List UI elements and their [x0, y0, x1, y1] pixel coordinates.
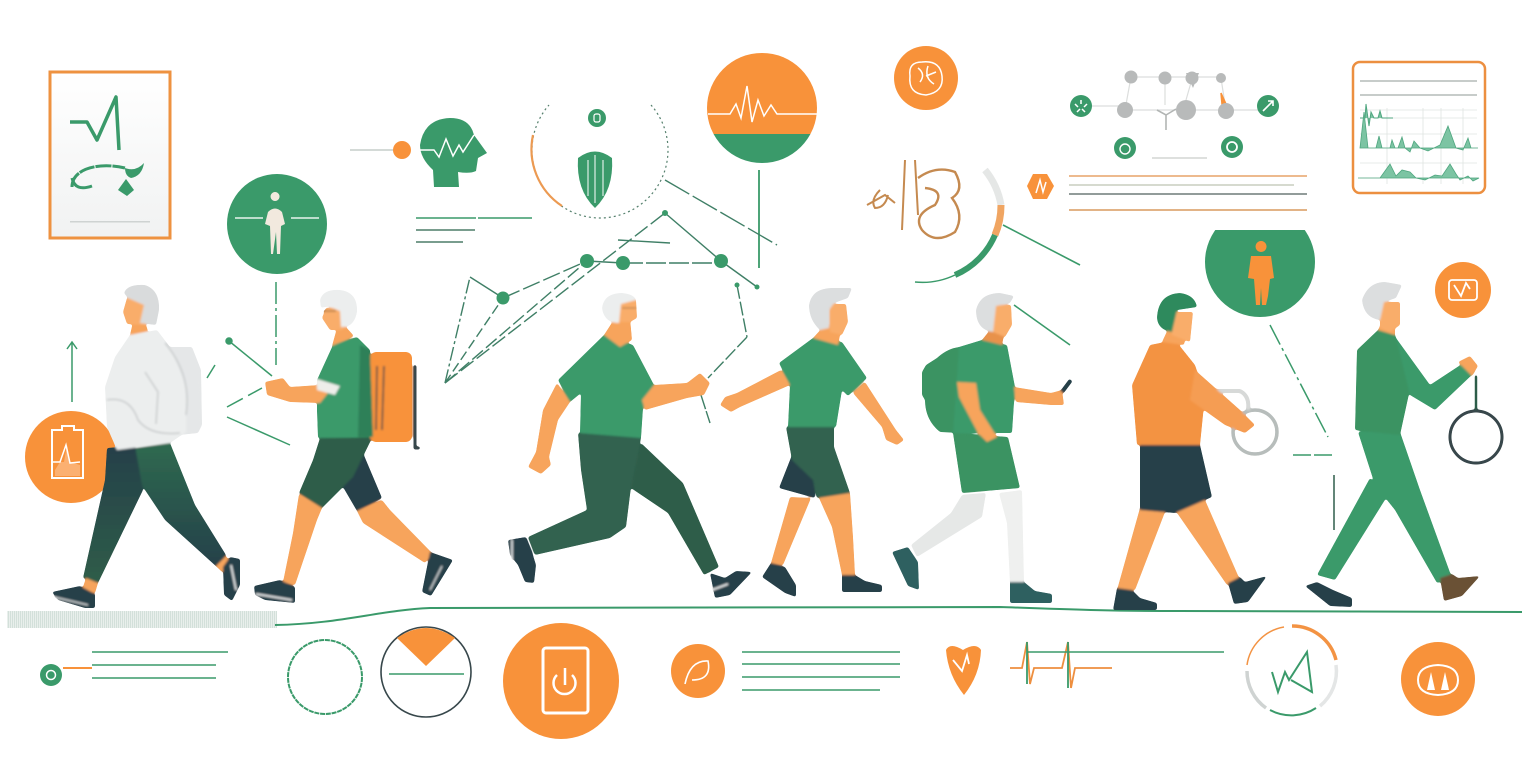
neck and face	[982, 330, 1005, 345]
left leg	[771, 497, 811, 565]
figure: walker 2 orange backpack	[254, 290, 453, 603]
backpack	[370, 352, 412, 442]
icon: small orange hexagon	[1027, 174, 1054, 199]
arm	[265, 378, 328, 403]
shoes	[892, 547, 919, 590]
icon: green node right	[1257, 95, 1279, 117]
panel: chart card top right	[1353, 62, 1485, 193]
shoes	[1305, 582, 1352, 607]
jacket	[105, 330, 186, 450]
chart: middle area series	[1360, 112, 1478, 152]
panel: report card top left	[50, 72, 170, 238]
dark shorts	[343, 453, 382, 511]
bottom row: segmented ring gauge	[1247, 626, 1336, 715]
icon: green node left	[1070, 95, 1092, 117]
hair	[976, 293, 1014, 332]
ring held	[1475, 375, 1477, 411]
icon: green node lower right	[1221, 136, 1243, 158]
neck and face	[1378, 322, 1395, 335]
dark shorts panel	[779, 455, 815, 498]
icon: orange brain circle	[894, 46, 958, 110]
network lines centre	[445, 180, 1080, 423]
connectors right side	[1270, 325, 1335, 530]
bottom row: orange leaf circle	[671, 644, 725, 698]
connectors near walkers one and two	[207, 338, 290, 445]
icon: green circle with silhouette	[227, 174, 327, 274]
front leg	[1358, 432, 1452, 583]
left arm	[957, 382, 997, 442]
bottom row: ECG trace	[1010, 642, 1224, 688]
shirt	[558, 335, 654, 438]
neck and face	[332, 326, 354, 346]
arm	[1396, 338, 1475, 410]
shoes	[254, 580, 295, 603]
skirt	[953, 433, 1020, 493]
shoes	[52, 586, 95, 608]
shoes	[508, 537, 536, 583]
hair	[602, 293, 636, 323]
icon: orange battery circle	[25, 411, 117, 503]
figure: walker 5 green backpack, white leggings	[892, 293, 1071, 603]
bottom row: green outlined circle	[288, 640, 362, 714]
network nodes	[496, 210, 760, 304]
text placeholder lines	[416, 218, 532, 242]
ground strip	[7, 607, 1522, 628]
icon: shield	[578, 152, 612, 208]
icon: trend check mark	[70, 97, 119, 150]
bottom row: dial with orange wedge	[381, 627, 471, 717]
green shorts	[299, 438, 372, 508]
icon: green node lower left	[1114, 137, 1136, 159]
figure: walker 4 green tee and shorts	[720, 288, 904, 597]
ring held	[1233, 410, 1277, 454]
back leg	[911, 493, 986, 557]
front leg	[83, 446, 143, 583]
trailing leg	[528, 433, 641, 555]
shorts	[1140, 445, 1212, 513]
figure: walker 1 white jacket	[52, 285, 240, 608]
back leg	[1317, 478, 1388, 580]
torso	[1355, 330, 1412, 435]
front leg	[283, 494, 322, 585]
figure: walker 3 running with green tee	[508, 293, 752, 598]
neck and face	[130, 322, 148, 335]
arm	[1190, 370, 1255, 433]
icon: pulse monitor circle	[707, 53, 817, 163]
backpack	[160, 347, 202, 436]
forward leg	[631, 443, 719, 575]
back leg	[357, 500, 432, 563]
figure: walker 6 orange shirt and cap	[1113, 293, 1277, 610]
connector: vertical line under pulse circle	[758, 170, 760, 268]
network diagram top right	[1070, 70, 1279, 159]
chart: bottom area series	[1358, 164, 1479, 181]
icon: small green dot	[588, 109, 606, 127]
green shorts	[786, 427, 850, 498]
bottom row: text lines	[742, 652, 900, 690]
hair	[124, 285, 159, 325]
shoes	[1113, 588, 1157, 610]
right arm	[853, 382, 904, 445]
shirt	[779, 338, 867, 427]
hand	[1458, 356, 1478, 376]
hair	[1362, 282, 1402, 320]
hair	[809, 288, 852, 330]
front leg	[999, 490, 1024, 583]
right arm with phone	[1014, 387, 1064, 405]
shirt	[1132, 340, 1205, 445]
dashed ring with shield icon	[531, 105, 668, 218]
icon: upward arrow	[67, 342, 77, 402]
figure: walker 7 green suit with ring	[1305, 282, 1502, 607]
back leg	[127, 443, 226, 568]
bottom row: green timer dot with lines	[40, 652, 228, 686]
front arm	[642, 373, 710, 410]
shirt	[317, 337, 373, 438]
text placeholder lines right	[1069, 176, 1307, 210]
bottom row: orange brain circle	[1401, 642, 1475, 716]
hair	[320, 290, 357, 327]
bottom row: orange power circle	[503, 623, 619, 739]
right leg	[819, 493, 855, 575]
icon: orange circle with heart monitor	[1435, 262, 1491, 318]
legs	[1117, 508, 1165, 590]
neck and face	[813, 325, 842, 345]
chart: top series	[1360, 104, 1393, 126]
left arm	[720, 370, 790, 412]
icon: orange figure in green semicircle	[1205, 230, 1315, 317]
icon: head profile with pulse	[350, 118, 487, 187]
icon: scribble ring	[867, 160, 1001, 282]
neck and face	[604, 318, 632, 347]
rear arm	[528, 383, 570, 474]
shoes	[762, 563, 796, 597]
connector: dashed vertical under green circle	[275, 282, 277, 365]
cap	[1157, 293, 1197, 332]
bottom row: orange heart shield	[946, 646, 981, 695]
icon: arc with leaves	[72, 163, 144, 196]
shirt	[953, 340, 1015, 433]
backpack	[922, 347, 965, 433]
neck and face	[1162, 325, 1188, 345]
